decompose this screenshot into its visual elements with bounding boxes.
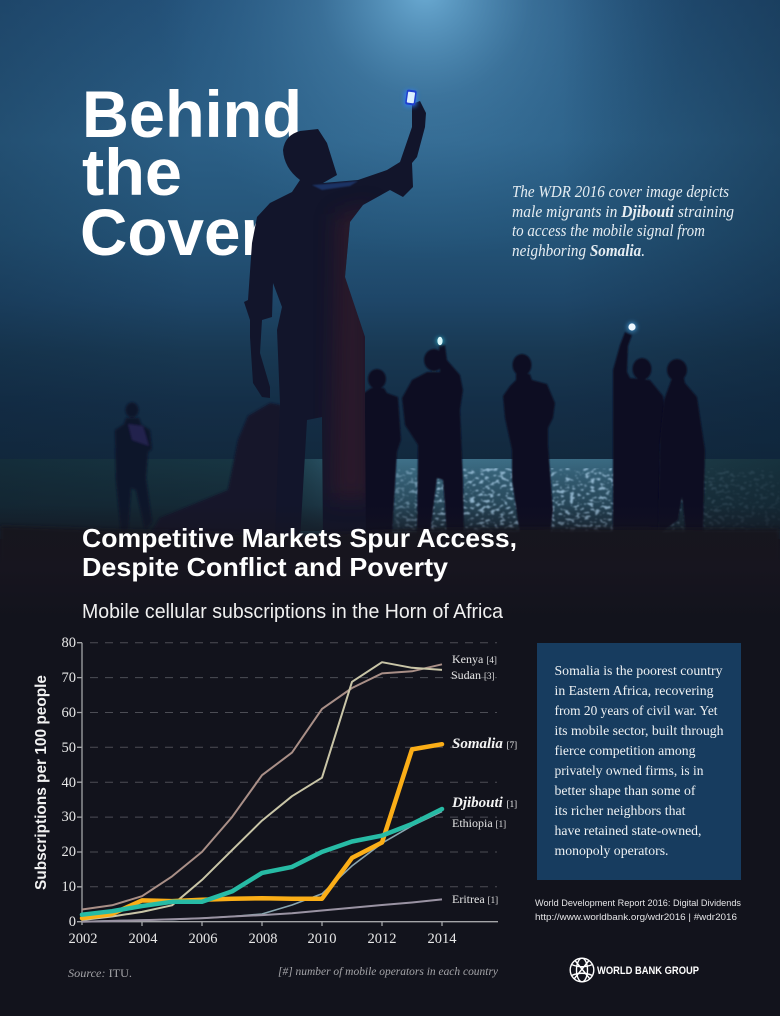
callout: Somalia bbox=[537, 643, 741, 880]
series labels: Somalia [7] bbox=[452, 736, 517, 752]
axes bbox=[77, 643, 498, 926]
seated figure bbox=[150, 403, 285, 535]
line: Kenya bbox=[82, 664, 442, 910]
x axis labels: 2014 bbox=[428, 931, 457, 947]
migrant at far left bbox=[115, 402, 152, 532]
heading bbox=[82, 523, 517, 582]
title bbox=[80, 77, 302, 269]
y axis labels: 50 bbox=[62, 740, 76, 756]
photo silhouettes: background migrants bbox=[115, 332, 705, 535]
callout: Somalia: fierce competition among bbox=[554, 744, 696, 759]
collar highlight bbox=[312, 181, 358, 190]
y axis labels: 20 bbox=[62, 844, 76, 860]
y axis labels: 10 bbox=[62, 879, 76, 895]
line: Ethiopia bbox=[82, 812, 442, 922]
callout: Somalia: monopoly operators. bbox=[554, 844, 668, 859]
icon: centre phone bbox=[436, 337, 444, 345]
icon: globe bbox=[570, 958, 594, 982]
x axis labels: 2010 bbox=[308, 931, 336, 947]
icon: main phone bbox=[404, 89, 417, 107]
line: Djibouti bbox=[82, 809, 442, 915]
x axis labels: 2004 bbox=[128, 931, 158, 947]
series labels: Sudan [3] bbox=[451, 668, 494, 682]
series labels: Eritrea [1] bbox=[452, 892, 498, 906]
callout: Somalia: have retained state-owned, bbox=[554, 824, 702, 839]
y axis labels: 80 bbox=[62, 635, 76, 651]
series labels: Kenya [4] bbox=[452, 652, 497, 666]
callout: Somalia: privately owned firms, is in bbox=[554, 764, 704, 779]
logo: World Bank Group bbox=[570, 958, 699, 982]
callout: Somalia: in Eastern Africa, recovering bbox=[554, 684, 714, 699]
report credit: World Development Report 2016: Digital Dividends bbox=[535, 898, 741, 909]
series labels: Ethiopia [1] bbox=[452, 816, 506, 830]
logo: World Bank Group: WORLD BANK GROUP bbox=[597, 965, 699, 977]
phone glows bbox=[404, 89, 637, 345]
callout: Somalia: from 20 years of civil war. Yet bbox=[554, 704, 718, 719]
series labels: Djibouti [1] bbox=[451, 795, 517, 811]
x axis labels: 2002 bbox=[68, 931, 98, 947]
y axis labels bbox=[62, 635, 76, 930]
title: the bbox=[82, 135, 182, 209]
warm light on shirt and trousers bbox=[330, 205, 372, 500]
main figure holding up a phone bbox=[244, 101, 426, 540]
line: Eritrea bbox=[82, 899, 442, 922]
callout: Somalia: better shape than some of bbox=[554, 784, 696, 799]
cover caption: The WDR 2016 cover image depicts bbox=[512, 182, 729, 201]
chart subtitle: Mobile cellular subscriptions in the Horn of Africa bbox=[82, 601, 504, 623]
y axis title: Subscriptions per 100 people bbox=[33, 675, 50, 890]
migrant behind the main figure bbox=[362, 369, 401, 535]
cover caption: neighboring Somalia. bbox=[512, 241, 645, 260]
migrant with phone, centre bbox=[402, 345, 464, 535]
series labels bbox=[451, 652, 517, 906]
title: Cover bbox=[80, 195, 266, 269]
title: Behind bbox=[82, 77, 302, 151]
migrant at far right bbox=[658, 359, 705, 535]
report credit bbox=[535, 898, 741, 923]
callout: Somalia: its richer neighbors that bbox=[554, 804, 686, 819]
migrant with raised phone, right bbox=[613, 332, 667, 535]
y axis labels: 0 bbox=[69, 914, 76, 930]
line: Somalia bbox=[82, 744, 442, 918]
heading: Despite Conflict and Poverty bbox=[82, 552, 449, 582]
callout: Somalia: Somalia is the poorest country bbox=[554, 664, 722, 679]
x axis labels bbox=[68, 931, 457, 947]
x axis labels: 2008 bbox=[248, 931, 278, 947]
cover caption bbox=[512, 182, 734, 260]
line: Sudan bbox=[82, 662, 442, 920]
cover caption: to access the mobile signal from bbox=[512, 221, 705, 240]
source note: Source: ITU. bbox=[68, 968, 132, 980]
y axis labels: 40 bbox=[62, 775, 76, 791]
y axis labels: 30 bbox=[62, 809, 76, 825]
callout: Somalia: its mobile sector, built through bbox=[554, 724, 724, 739]
y axis labels: 60 bbox=[62, 705, 76, 721]
shore in the foreground bbox=[0, 505, 780, 1016]
operators note: [#] number of mobile operators in each country bbox=[278, 966, 499, 978]
line chart bbox=[33, 635, 517, 947]
x axis labels: 2006 bbox=[188, 931, 218, 947]
photo background: night sky and sea bbox=[0, 0, 780, 539]
y axis labels: 70 bbox=[62, 670, 76, 686]
migrant with hands on hips bbox=[503, 354, 555, 535]
cover caption: male migrants in Djibouti straining bbox=[512, 202, 734, 221]
x axis labels: 2012 bbox=[368, 931, 396, 947]
report credit: http://www.worldbank.org/wdr2016 | #wdr2016 bbox=[535, 912, 737, 923]
icon: right phone bbox=[627, 322, 637, 332]
heading: Competitive Markets Spur Access, bbox=[82, 523, 517, 553]
